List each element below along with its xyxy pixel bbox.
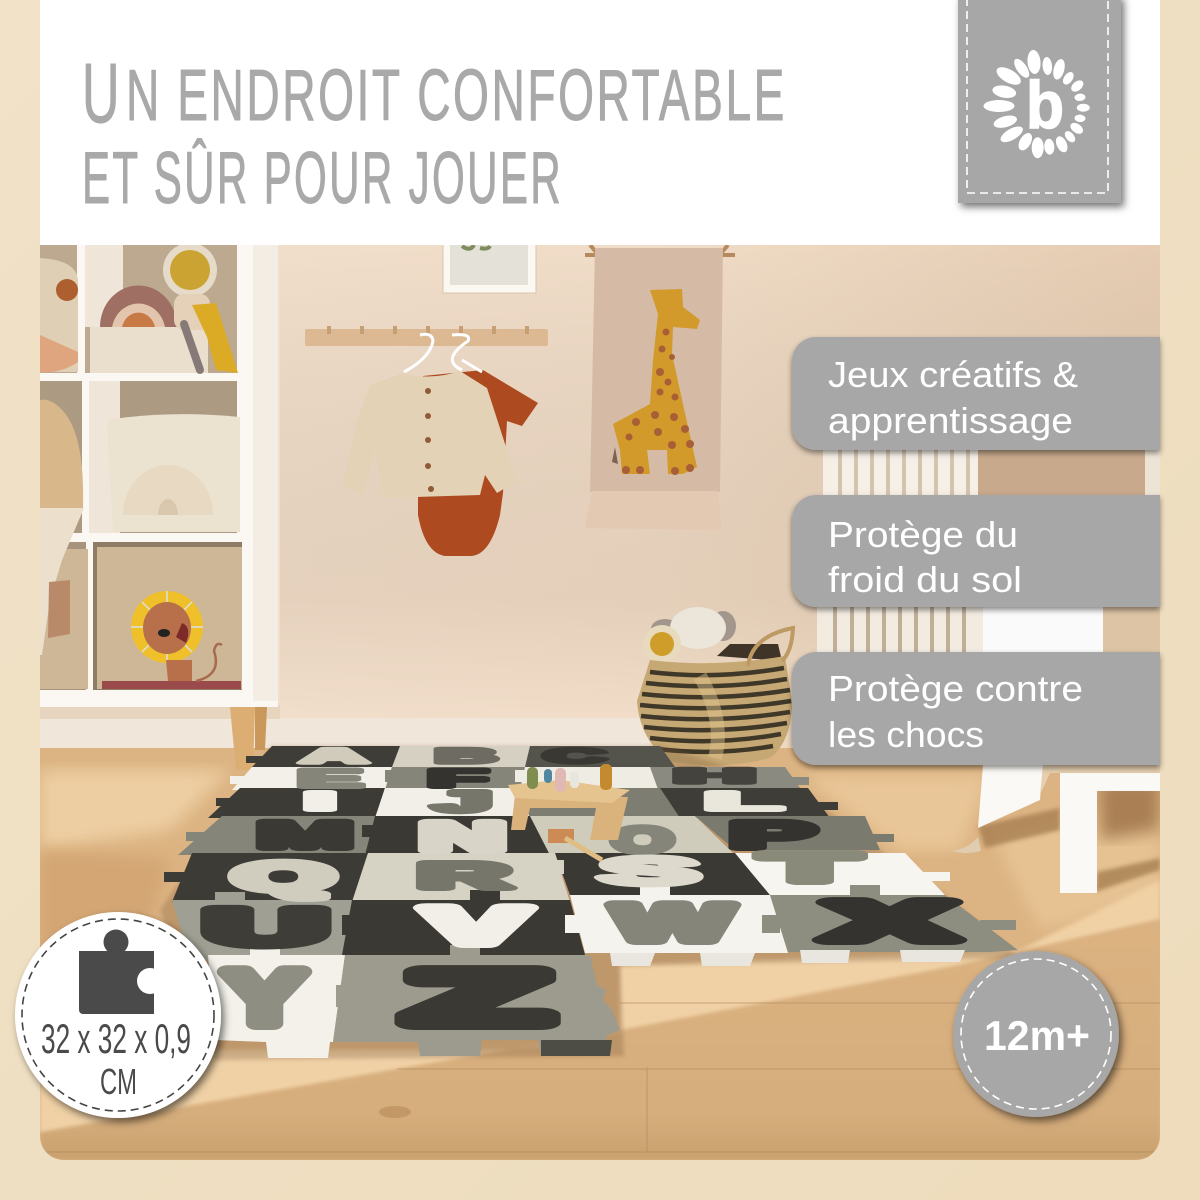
row 4 tiles [178, 816, 375, 855]
feature pill: creative play: Jeux créatifs & [828, 354, 1078, 395]
letters: I [304, 786, 336, 816]
feature pill: shock protection [792, 652, 1160, 765]
radiator top [823, 448, 978, 496]
row 1 tiles [252, 746, 400, 767]
logo tag [958, 0, 1121, 203]
floor [40, 748, 1160, 1160]
seam tabs between tiles [215, 770, 880, 1007]
row 5 tiles [172, 853, 368, 902]
wooden rainbow toy [100, 285, 177, 327]
size badge: CM [100, 1061, 137, 1102]
giraffe [612, 289, 700, 475]
letters: B [435, 745, 497, 768]
coat rack peg rail [305, 326, 548, 346]
letters: P [730, 815, 815, 857]
letters: F [428, 766, 487, 793]
row 6 bottom tabs [610, 950, 965, 966]
row 7 tiles [208, 955, 345, 1058]
title: ET SÛR POUR JOUER [82, 138, 563, 219]
age badge: 12m+ [984, 1012, 1090, 1059]
icon: puzzle piece [79, 930, 166, 1014]
feature pill: creative play: apprentissage [828, 400, 1073, 441]
letters: C [544, 745, 605, 768]
icon: sunflower logo: b [1026, 68, 1064, 143]
photo: nursery room with alphabet play mat [40, 240, 1160, 1160]
wall [278, 245, 1160, 692]
row 3 tiles [208, 788, 385, 818]
feature pill: shock protection: les chocs [828, 714, 984, 755]
terracotta onesie [418, 370, 538, 556]
radiator bottom [817, 605, 985, 653]
letters: U [205, 898, 327, 956]
age badge [953, 951, 1119, 1117]
row 2 tiles [232, 767, 392, 790]
letters: M [257, 815, 353, 857]
title: N ENDROIT CONFORTABLE [126, 56, 787, 136]
toy basket and rocking toy [40, 258, 78, 372]
letters: R [418, 855, 510, 896]
size badge [15, 912, 221, 1118]
letters: V [425, 898, 528, 956]
letters [205, 745, 953, 1040]
rainbow fabric basket [107, 414, 240, 532]
title [82, 46, 787, 219]
fringe [585, 491, 722, 530]
shelf wooden legs [230, 707, 267, 770]
wooden hammer bench toy [508, 764, 630, 860]
letters: L [705, 786, 782, 816]
letters: N [420, 814, 505, 860]
feature pill: floor cold protection: Protège du [828, 514, 1018, 555]
bottom dark tab [541, 1040, 612, 1056]
waffle throw top [978, 448, 1160, 496]
feature pill: creative play [792, 337, 1160, 450]
letters: T [763, 844, 857, 890]
dimensions text: 32 x 32 x 0,9 [41, 1015, 191, 1062]
white box [90, 327, 208, 373]
chair and white blanket [952, 765, 1160, 893]
feature pill: shock protection: Protège contre [828, 668, 1083, 709]
framed picture [443, 240, 536, 293]
letters: X [827, 890, 953, 952]
plush toys in basket [650, 607, 736, 656]
cardigan on hanger [343, 334, 517, 498]
giraffe wall hanging [585, 245, 735, 530]
letters: H [674, 765, 755, 788]
letters: Z [409, 956, 546, 1039]
icon: sunflower logo [984, 49, 1090, 158]
striped cushion [40, 400, 83, 508]
woven belly basket [637, 628, 793, 765]
outer puzzle teeth [164, 756, 1016, 930]
white throw bottom [983, 605, 1160, 653]
lion storage box [97, 547, 242, 689]
letters: J [434, 786, 491, 818]
feature pill: floor cold protection [792, 495, 1160, 607]
baseboard [40, 718, 650, 748]
letters: A [301, 745, 367, 768]
letters: O [612, 821, 673, 860]
letters: E [298, 766, 362, 793]
letters: Y [225, 956, 304, 1040]
textile on shelf [40, 508, 84, 655]
letters: W [614, 894, 733, 952]
white header panel [40, 0, 1160, 246]
alphabet foam mat [160, 745, 1020, 1060]
row 6 tiles [172, 900, 352, 960]
left lower box [40, 549, 88, 689]
letters: S [601, 851, 698, 893]
title: U [82, 46, 122, 140]
feature pill: floor cold protection: froid du sol [828, 559, 1022, 600]
mat cast shadow [160, 746, 1020, 1060]
white shelf unit [40, 243, 278, 707]
tassels [48, 580, 70, 638]
lion plush toy [163, 243, 238, 373]
letters: Q [233, 854, 334, 900]
